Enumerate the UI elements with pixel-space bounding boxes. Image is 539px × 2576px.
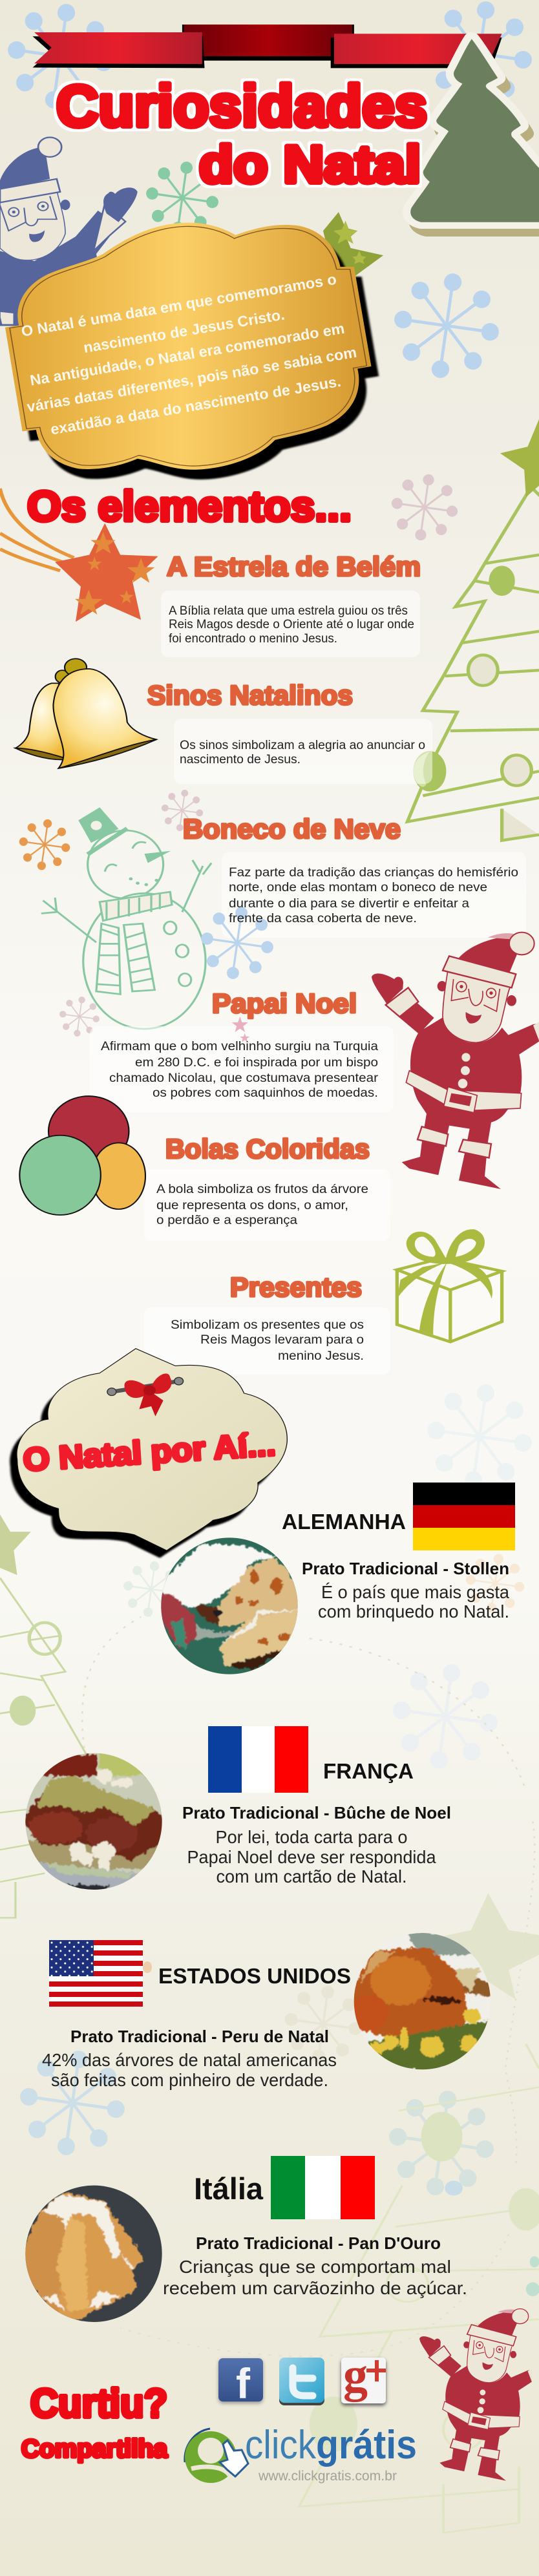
heading: italia: Itália xyxy=(194,2171,264,2206)
country: italia xyxy=(19,2156,467,2330)
faded snowflake: orange xyxy=(466,1554,524,1612)
text: papai noel: chamado Nicolau, que costumava presentear xyxy=(109,1072,379,1085)
text: bolas: A bola simboliza os frutos da árvore xyxy=(156,1183,368,1196)
icon: google plus: g xyxy=(343,2348,368,2402)
santa: blue waving xyxy=(0,137,138,326)
footer: compartilha: Compartilha xyxy=(21,2435,167,2463)
text: boneco: Faz parte da tradição das crianças do hemisfério xyxy=(229,866,518,880)
text: boneco xyxy=(229,866,518,925)
heading: franca: FRANÇA xyxy=(323,1759,414,1783)
photo: peru de natal xyxy=(354,1933,491,2069)
text: sinos: nascimento de Jesus. xyxy=(180,753,301,766)
country: franca xyxy=(19,1726,451,1897)
icon: german flag xyxy=(413,1483,515,1550)
icon: red bow xyxy=(107,1373,184,1417)
element: boneco de neve xyxy=(41,807,526,1029)
icon: italian flag xyxy=(271,2156,375,2219)
heading: boneco de neve: Boneco de Neve xyxy=(183,814,401,844)
plaque: o natal por ai xyxy=(10,1349,287,1558)
snowflake: pink beneath snowman xyxy=(59,997,100,1037)
dish: Prato Tradicional - Bûche de Noel xyxy=(182,1803,451,1822)
card text: Na antiguidade, o Natal era comemorado em xyxy=(28,320,346,389)
fact: recebem um carvãozinho de açúcar. xyxy=(163,2278,467,2298)
heading: bolas coloridas: Bolas Coloridas xyxy=(165,1134,370,1164)
text: papai noel: Afirmam que o bom velhinho surgiu na Turquia xyxy=(101,1040,378,1053)
heading: o natal por ai: O Natal por Aí... xyxy=(22,1426,277,1478)
icon: santa red xyxy=(372,933,539,1189)
panel: boneco text xyxy=(222,852,526,938)
wordmark: grátis xyxy=(316,2423,417,2467)
text: papai noel: os pobres com saquinhos de moedas. xyxy=(153,1086,378,1100)
fact: Por lei, toda carta para o xyxy=(216,1827,407,1847)
text: bolas xyxy=(156,1183,368,1227)
icon: comet trails xyxy=(0,489,74,571)
text: sinos xyxy=(180,739,425,766)
text: estrela: Reis Magos desde o Oriente até o lugar onde xyxy=(169,618,414,631)
heading: presentes: Presentes xyxy=(230,1272,362,1302)
panel: presentes text xyxy=(144,1307,390,1375)
card text xyxy=(20,271,358,438)
url: www.clickgratis.com.br xyxy=(258,2469,397,2484)
icon: twitter xyxy=(279,2358,324,2405)
snowflake: top left xyxy=(8,4,112,109)
title xyxy=(56,74,427,194)
icon: facebook: f xyxy=(236,2360,251,2407)
photo: pan d'ouro xyxy=(25,2186,162,2322)
fact: com brinquedo no Natal. xyxy=(318,1601,509,1621)
dish: Prato Tradicional - Pan D'Ouro xyxy=(196,2233,441,2253)
fact: são feitas com pinheiro de verdade. xyxy=(51,2070,328,2090)
text: papai noel xyxy=(101,1040,379,1100)
icon: french flag xyxy=(208,1726,308,1793)
wordmark: click xyxy=(245,2423,317,2467)
faded background tree: lower right xyxy=(299,2044,539,2533)
snowflake: orange xyxy=(19,819,70,870)
text: boneco: durante o dia para se divertir e enfeitar a xyxy=(229,897,469,911)
faded background tree: left side xyxy=(0,1578,89,1918)
snowflake: blue over snowman xyxy=(201,907,273,979)
fact: É o país que mais gasta xyxy=(321,1582,509,1602)
text: boneco: frente da casa coberta de neve. xyxy=(229,912,417,925)
snowflake: pink near snowman xyxy=(162,790,203,831)
country: estados unidos xyxy=(42,1929,498,2090)
element: papai noel xyxy=(90,933,539,1189)
dish: Prato Tradicional - Peru de Natal xyxy=(70,2027,329,2046)
card text: O Natal é uma data em que comemoramos o xyxy=(20,271,337,340)
text: presentes: menino Jesus. xyxy=(278,1349,364,1363)
icon: pink stars xyxy=(232,1017,249,1042)
text: papai noel: em 280 D.C. e foi inspirada por um bispo xyxy=(135,1056,378,1070)
icon: google plus xyxy=(341,2348,386,2405)
text: bolas: que representa os dons, o amor, xyxy=(156,1199,348,1212)
card text: exatidão a data do nascimento de Jesus. xyxy=(49,373,342,438)
photo: buche de noel xyxy=(25,1753,162,1890)
text: boneco: norte, onde elas montam o boneco de neve xyxy=(229,881,487,894)
icon: small santa xyxy=(419,2308,532,2481)
element: bolas coloridas xyxy=(19,1096,390,1241)
fact xyxy=(318,1582,509,1621)
fact xyxy=(187,1827,436,1886)
text: estrela xyxy=(169,604,414,646)
element: presentes xyxy=(144,1229,502,1375)
fact xyxy=(163,2257,467,2298)
faded snowflake: right of plaque xyxy=(427,1384,532,1489)
dotted path: background trail xyxy=(82,1617,534,2356)
element: sinos natalinos xyxy=(16,659,432,784)
text: bolas: o perdão e a esperança xyxy=(156,1214,297,1227)
text: estrela: foi encontrado o menino Jesus. xyxy=(169,632,337,646)
faded snowflake: blue lower left xyxy=(20,2051,125,2155)
snowflake: pink upper xyxy=(392,474,458,540)
panel: sinos text xyxy=(174,719,432,784)
fact: com um cartão de Natal. xyxy=(216,1866,407,1886)
fact: Papai Noel deve ser respondida xyxy=(187,1847,436,1867)
heading: sinos natalinos: Sinos Natalinos xyxy=(147,680,353,710)
panel: estrela text xyxy=(161,591,420,657)
country: alemanha xyxy=(155,1483,515,1680)
icon: coloured balls xyxy=(19,1096,145,1215)
faded background star: right xyxy=(437,1893,539,2000)
text: presentes: Simbolizam os presentes que os xyxy=(171,1318,364,1332)
title: Curiosidades xyxy=(56,74,427,139)
section heading: os elementos: Os elementos... xyxy=(27,482,352,530)
heading: alemanha: ALEMANHA xyxy=(282,1510,406,1534)
text: estrela: A Bíblia relata que uma estrela guiou os três xyxy=(169,604,408,618)
faded snowflake: lower right xyxy=(389,2091,494,2195)
element: estrela de belem xyxy=(0,489,421,657)
icon: gift box xyxy=(397,1229,502,1342)
icon: bells xyxy=(16,659,156,768)
heading: papai noel: Papai Noel xyxy=(212,988,357,1019)
text: sinos: Os sinos simbolizam a alegria ao anunciar o xyxy=(180,739,425,752)
star: tree top xyxy=(500,419,539,497)
heading: a estrela de belem: A Estrela de Belém xyxy=(167,551,421,582)
snowflake: green near title xyxy=(146,162,218,234)
text: presentes xyxy=(171,1318,364,1363)
faded background star: mid left xyxy=(0,1514,31,1575)
fact: Crianças que se comportam mal xyxy=(179,2257,451,2277)
heading: estados unidos: ESTADOS UNIDOS xyxy=(158,1964,351,1988)
ribbon banner xyxy=(33,25,502,68)
text: presentes: Reis Magos levaram para o xyxy=(200,1333,364,1347)
tree: green outline right xyxy=(407,487,539,840)
photo: stollen xyxy=(161,1537,298,1674)
stars: olive behind card xyxy=(323,212,383,275)
fact xyxy=(42,2050,337,2090)
logo: clickgratis xyxy=(185,2423,417,2484)
faded snowflake: tan xyxy=(284,1985,362,2063)
card: gold intro plaque xyxy=(5,223,379,480)
card text: nascimento de Jesus Cristo. xyxy=(82,306,286,356)
card text: várias datas diferentes, pois não se sabia com xyxy=(26,344,358,416)
snowflake: large blue xyxy=(394,273,499,378)
footer: curtiu: Curtiu? xyxy=(30,2381,167,2426)
icon: logo g xyxy=(185,2429,248,2483)
icon: us flag xyxy=(49,1940,152,2007)
dish: Prato Tradicional - Stollen xyxy=(302,1559,509,1578)
panel: bolas text xyxy=(144,1169,390,1241)
title: do Natal xyxy=(199,136,421,194)
icon: star of bethlehem xyxy=(55,523,158,622)
snowflake: top right xyxy=(427,1,532,106)
faded snowflake: right of france xyxy=(393,1664,498,1769)
icon: facebook xyxy=(218,2358,263,2407)
icon: snowman xyxy=(41,807,211,1029)
faded snowflake: green xyxy=(123,1561,179,1617)
fact: 42% das árvores de natal americanas xyxy=(42,2050,337,2070)
tree: top right xyxy=(410,39,539,230)
panel: papai noel text xyxy=(90,1026,394,1112)
